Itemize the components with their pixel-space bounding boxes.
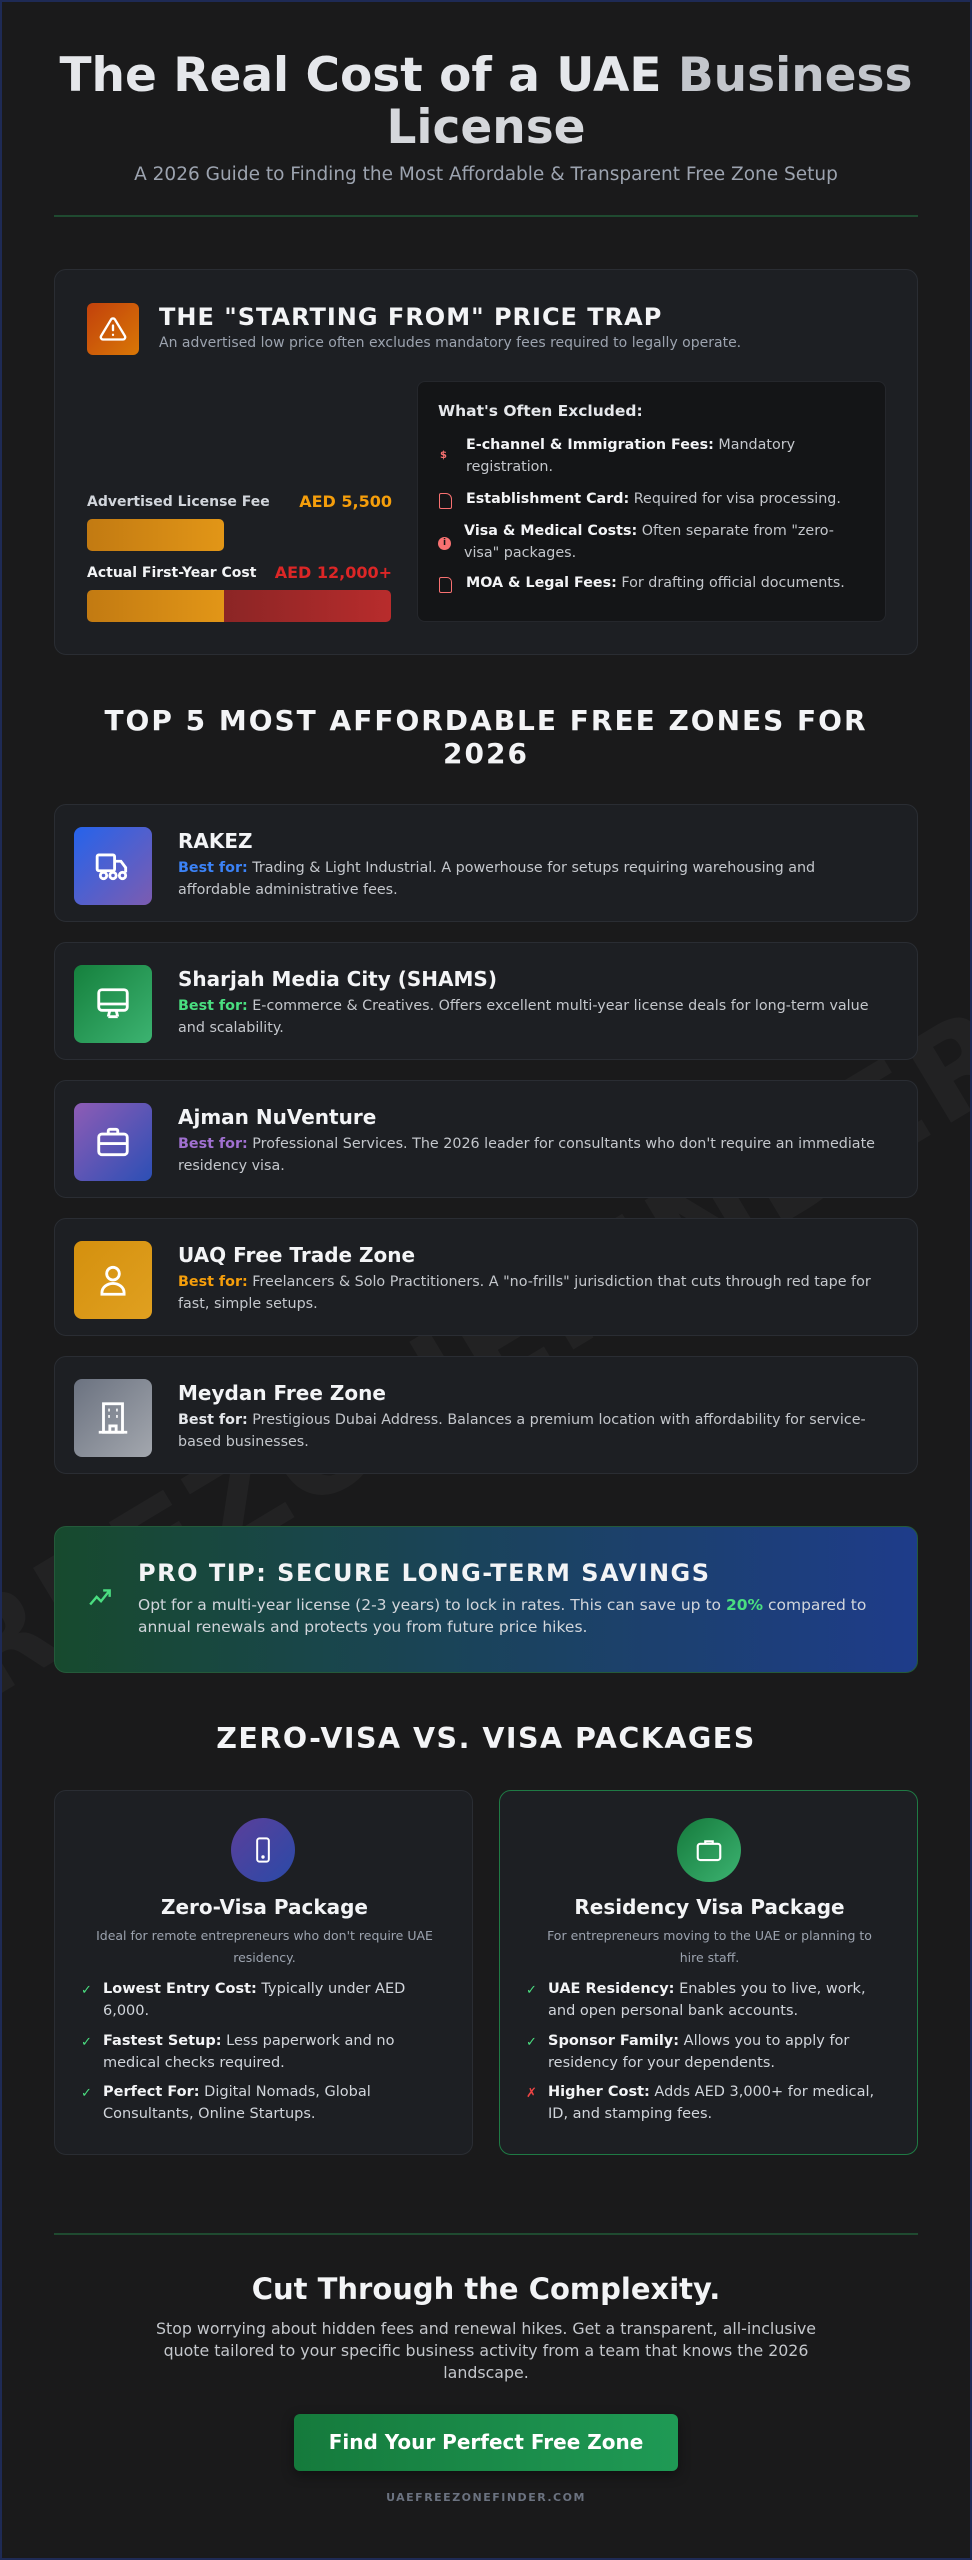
bar chart: AED 5,500: [299, 492, 392, 511]
footer: UAEFREEZONEFINDER.COM: [386, 2491, 586, 2504]
subtitle: A 2026 Guide to Finding the Most Affordable & Transparent Free Zone Setup: [134, 164, 838, 185]
card: UAQ: Best for: Freelancers & Solo Practitioners. A "no-frills" jurisdiction that cuts through red tape for fast, simple setups.: [178, 1274, 871, 1312]
heading: THE "STARTING FROM" PRICE TRAP: [159, 303, 662, 331]
card: RAKEZ: RAKEZ: [178, 829, 253, 853]
excluded list: $: [440, 450, 447, 461]
panel: residency visa: UAE Residency: Enables you to live, work, and open personal bank accounts.: [548, 1981, 866, 2019]
panel: residency visa: ✓: [526, 2035, 537, 2050]
card: SHAMS: Sharjah Media City (SHAMS): [178, 967, 497, 991]
callout: pro tip: [54, 1526, 918, 1673]
card: SHAMS: Best for: E-commerce & Creatives. Offers excellent multi-year license deals for long-term value and scalability.: [178, 998, 868, 1036]
bar chart: [87, 492, 392, 622]
panel: residency visa: ✗: [526, 2086, 537, 2101]
icon: trending up: [89, 1589, 111, 1606]
CTA text: Stop worrying about hidden fees and renewal hikes. Get a transparent, all-inclusive quote tailored to your specific business activity from a team that knows the 2026 landscape.: [156, 2319, 816, 2382]
card: SHAMS: [54, 942, 918, 1060]
bar chart: AED 12,000+: [275, 563, 392, 582]
icon: bag: [677, 1818, 741, 1882]
icon: building: [74, 1379, 152, 1457]
panel: zero-visa: ✓: [81, 2035, 92, 2050]
panel: zero-visa: [54, 1790, 473, 2155]
excluded list: MOA & Legal Fees: For drafting official documents.: [466, 575, 845, 591]
heading: zero-visa vs visa: ZERO-VISA VS. VISA PACKAGES: [216, 1722, 756, 1755]
panel: residency visa: [499, 1790, 918, 2155]
excluded list: What's Often Excluded:: [438, 402, 643, 420]
panel: zero-visa: Lowest Entry Cost: Typically under AED 6,000.: [103, 1981, 405, 2019]
panel: zero-visa: ✓: [81, 2086, 92, 2101]
icon: monitor: [74, 965, 152, 1043]
bar chart: Actual First-Year Cost: [87, 565, 256, 581]
card: Meydan: [54, 1356, 918, 1474]
card: RAKEZ: Best for: Trading & Light Industrial. A powerhouse for setups requiring warehousing and affordable administrative fees.: [178, 860, 815, 898]
panel: zero-visa: Fastest Setup: Less paperwork and no medical checks required.: [103, 2033, 394, 2071]
button: Find Your Perfect Free Zone: [329, 2430, 643, 2454]
panel: zero-visa: Zero-Visa Package: [161, 1895, 368, 1919]
icon: person: [74, 1241, 152, 1319]
excluded list: Visa & Medical Costs: Often separate from "zero-visa" packages.: [464, 523, 834, 561]
button: [294, 2414, 678, 2471]
panel: zero-visa: ✓: [81, 1983, 92, 1998]
title: [60, 48, 912, 155]
card: Ajman: [54, 1080, 918, 1198]
panel: residency visa: Sponsor Family: Allows you to apply for residency for your dependents.: [548, 2033, 849, 2071]
card: UAQ: [54, 1218, 918, 1336]
card: Ajman: Ajman NuVenture: [178, 1105, 376, 1129]
excluded list: i: [443, 538, 446, 548]
CTA heading: Cut Through the Complexity.: [252, 2272, 720, 2306]
heading: top 5: TOP 5 MOST AFFORDABLE FREE ZONES FOR 2026: [104, 704, 868, 770]
panel: residency visa: Higher Cost: Adds AED 3,000+ for medical, ID, and stamping fees.: [548, 2084, 874, 2122]
panel: zero-visa: Ideal for remote entrepreneurs who don't require UAE residency.: [96, 1928, 433, 1965]
panel: price trap: [54, 269, 918, 655]
excluded list: Establishment Card: Required for visa processing.: [466, 491, 841, 507]
icon: briefcase: [74, 1103, 152, 1181]
card: RAKEZ: [54, 804, 918, 922]
icon: truck: [74, 827, 152, 905]
panel: residency visa: ✓: [526, 1983, 537, 1998]
icon: warning: [87, 303, 139, 355]
panel: residency visa: Residency Visa Package: [574, 1895, 845, 1919]
excluded list: E-channel & Immigration Fees: Mandatory registration.: [466, 437, 795, 475]
icon: phone: [231, 1818, 295, 1882]
subheading: An advertised low price often excludes mandatory fees required to legally operate.: [159, 335, 741, 351]
panel: residency visa: For entrepreneurs moving to the UAE or planning to hire staff.: [547, 1928, 872, 1965]
panel: zero-visa: Perfect For: Digital Nomads, Global Consultants, Online Startups.: [103, 2084, 371, 2122]
card: Meydan: Meydan Free Zone: [178, 1381, 386, 1405]
title: License: [386, 100, 586, 155]
card: UAQ: UAQ Free Trade Zone: [178, 1243, 415, 1267]
excluded list: [417, 381, 886, 622]
callout: pro tip: PRO TIP: SECURE LONG-TERM SAVINGS: [138, 1559, 711, 1587]
callout: pro tip: Opt for a multi-year license (2-3 years) to lock in rates. This can save up to 20% compared to annual renewals and protects you from future price hikes.: [138, 1596, 866, 1636]
bar chart: Advertised License Fee: [87, 494, 270, 510]
title: The Real Cost of a UAE Business: [60, 48, 912, 103]
card: Ajman: Best for: Professional Services. The 2026 leader for consultants who don't require an immediate residency visa.: [178, 1136, 875, 1174]
card: Meydan: Best for: Prestigious Dubai Address. Balances a premium location with affordability for service-based businesses.: [178, 1412, 866, 1450]
